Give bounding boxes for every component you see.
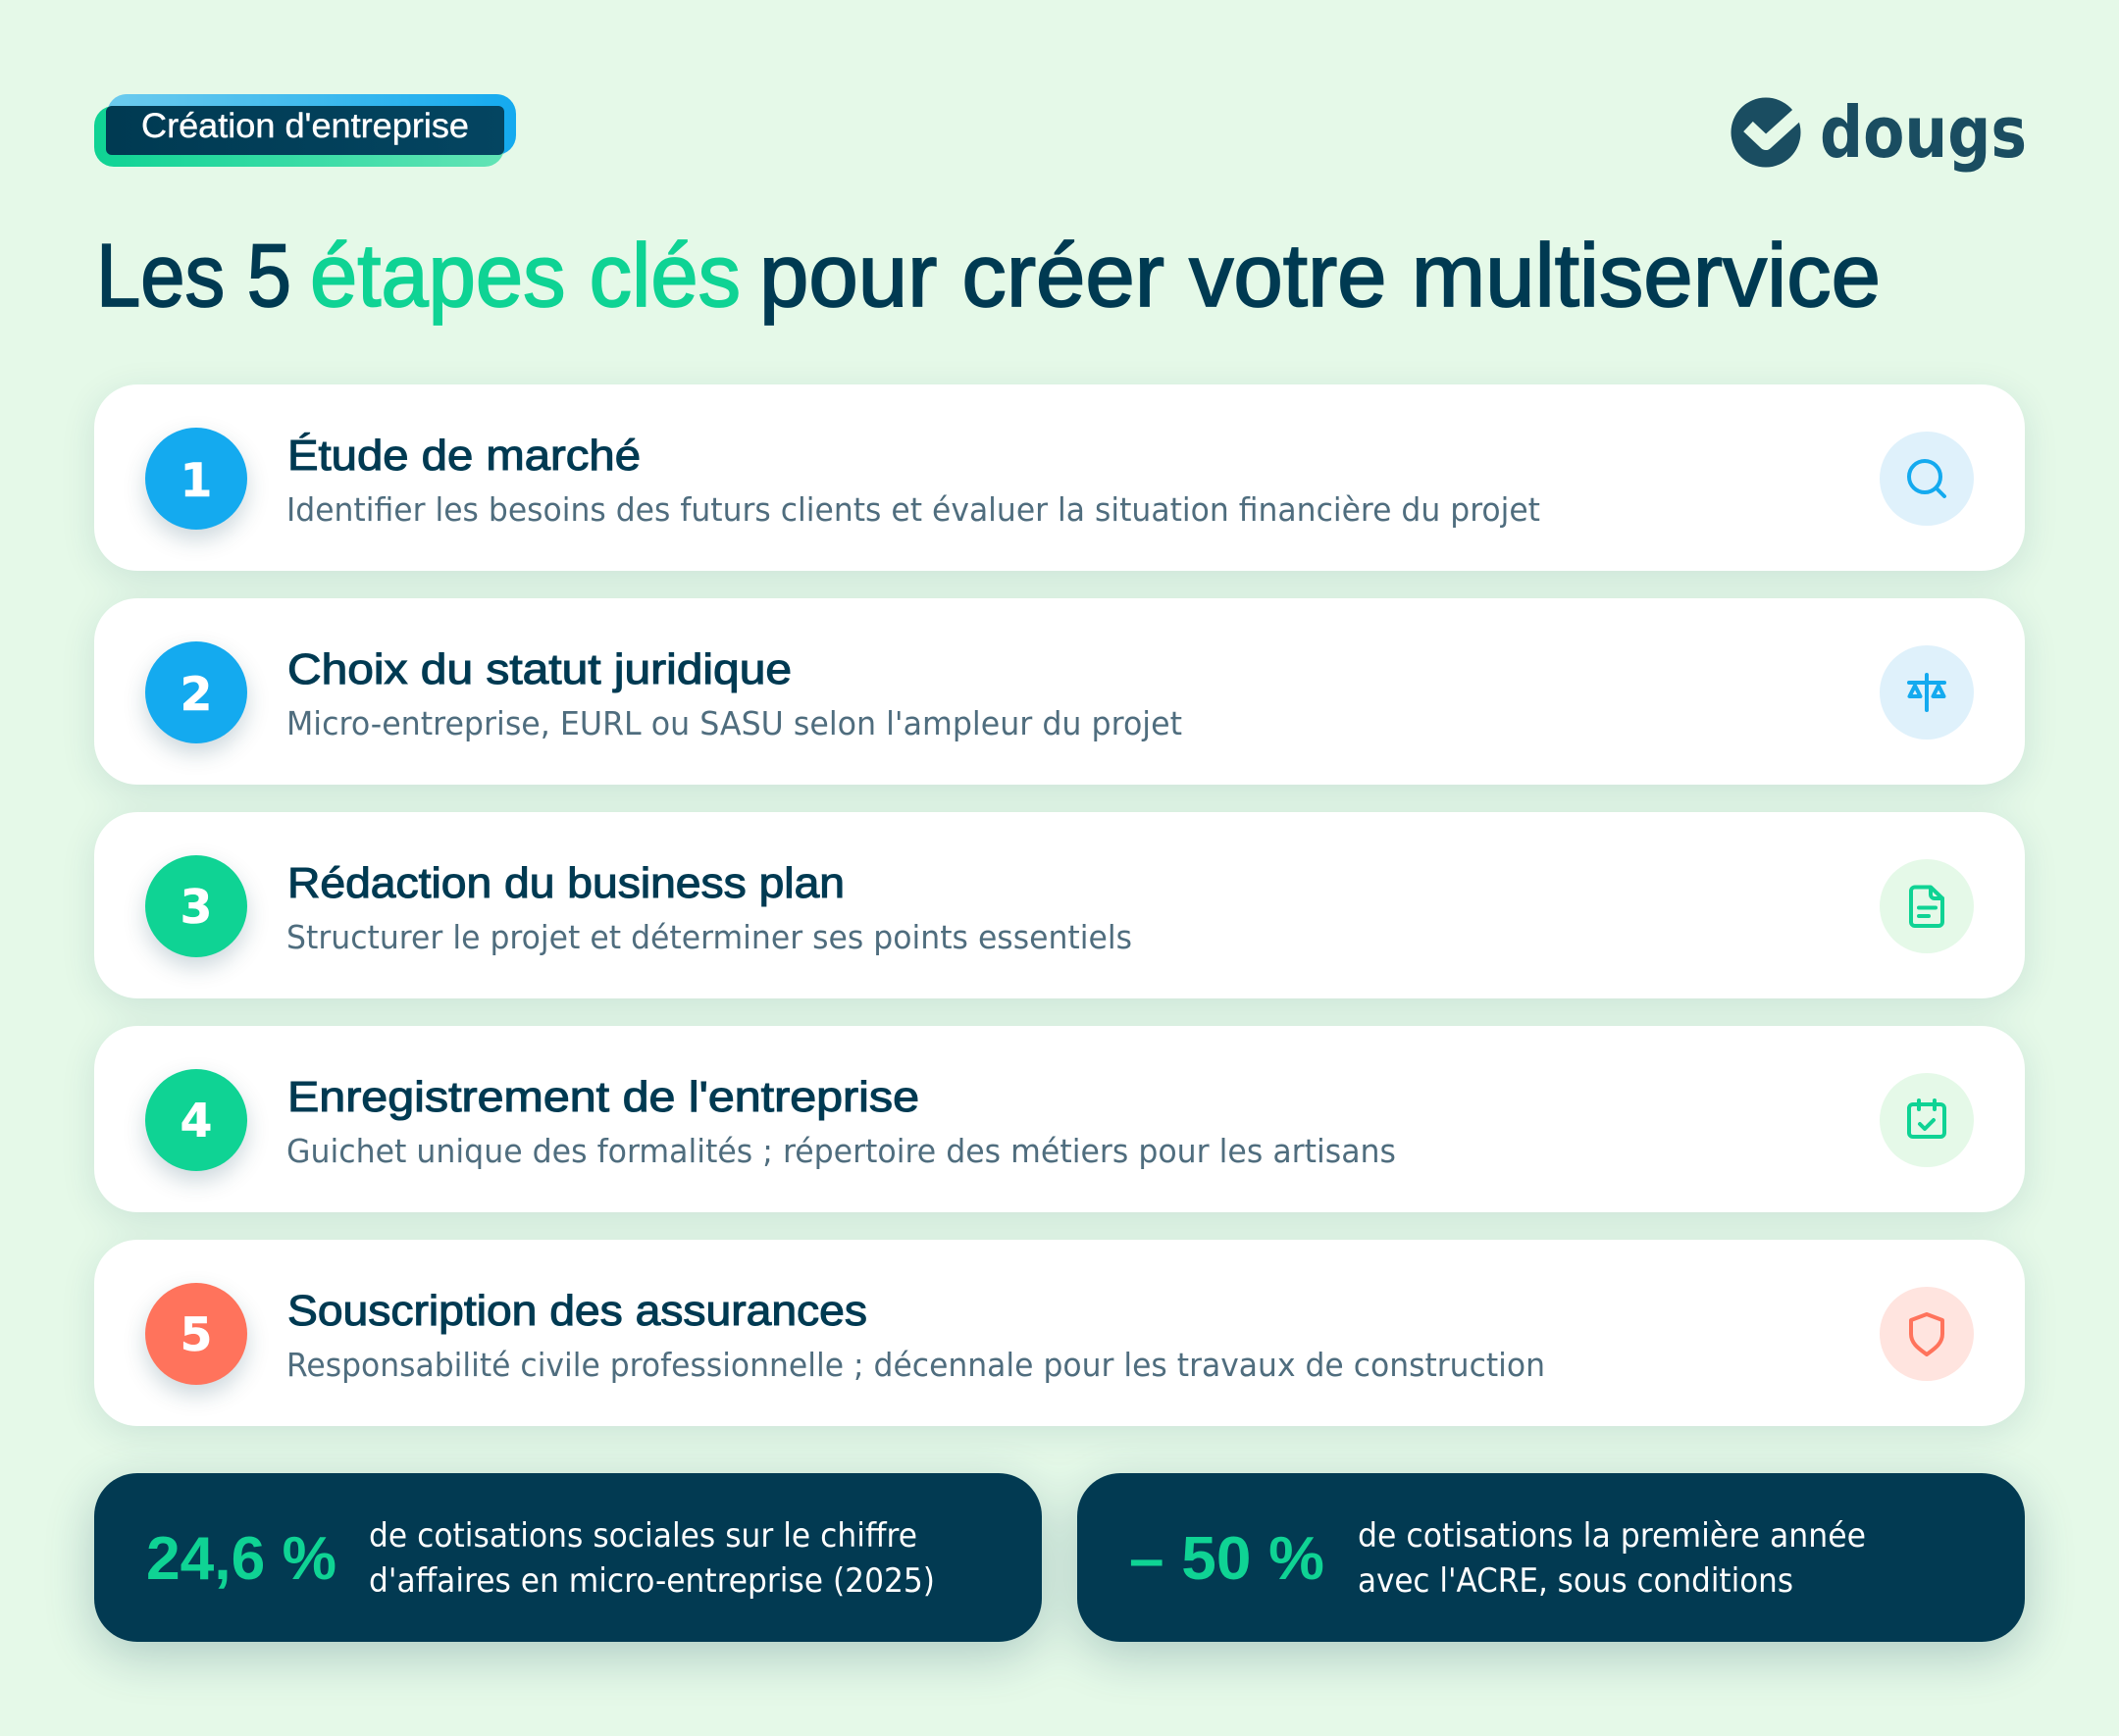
number badge 1 bbox=[145, 428, 247, 539]
stat panel: 24,6 % bbox=[94, 1473, 1042, 1642]
step 5 heading: Souscription des assurances bbox=[287, 1287, 867, 1335]
badge: Création d'entreprise: Création d'entreprise bbox=[141, 107, 469, 145]
icon: calendar bbox=[1880, 1073, 1974, 1167]
step 2 heading: Choix du statut juridique bbox=[287, 645, 792, 693]
number badge 4 bbox=[145, 1069, 247, 1181]
step 2 description: Micro-entreprise, EURL ou SASU selon l'ampleur du projet bbox=[286, 705, 1182, 742]
number badge 3: 3 bbox=[181, 881, 212, 935]
title: Les 5 bbox=[96, 227, 291, 326]
title bbox=[96, 227, 1881, 326]
panel: step 5 bbox=[94, 1240, 2025, 1426]
badge: Création d'entreprise bbox=[94, 94, 516, 167]
icon: document bbox=[1880, 859, 1974, 953]
icon: magnifier bbox=[1880, 432, 1974, 526]
step 4 heading: Enregistrement de l'entreprise bbox=[287, 1073, 919, 1121]
stat text: de cotisations la première année bbox=[1358, 1516, 1866, 1555]
panel: step 3 bbox=[94, 812, 2025, 998]
number badge 2 bbox=[145, 641, 247, 753]
number badge 2: 2 bbox=[181, 668, 212, 722]
panel: step 1 bbox=[94, 384, 2025, 571]
icon: shield bbox=[1880, 1287, 1974, 1381]
title: étapes clés bbox=[310, 227, 741, 326]
logo: dougs: dougs bbox=[1820, 91, 2027, 174]
stat value: – 50 % bbox=[1129, 1525, 1324, 1593]
number badge 1: 1 bbox=[181, 454, 212, 508]
stat text: avec l'ACRE, sous conditions bbox=[1358, 1561, 1793, 1600]
number badge 5: 5 bbox=[181, 1308, 212, 1362]
stat text: d'affaires en micro-entreprise (2025) bbox=[369, 1561, 935, 1600]
step 3 heading: Rédaction du business plan bbox=[287, 859, 845, 907]
step 1 heading: Étude de marché bbox=[287, 432, 641, 480]
stat panel: – 50 % bbox=[1077, 1473, 2025, 1642]
logo: dougs bbox=[1731, 91, 2027, 174]
stat text bbox=[369, 1516, 935, 1600]
number badge 4: 4 bbox=[181, 1095, 212, 1149]
step 4 description: Guichet unique des formalités ; répertoire des métiers pour les artisans bbox=[286, 1133, 1396, 1170]
stat text: de cotisations sociales sur le chiffre bbox=[369, 1516, 917, 1555]
stat text bbox=[1358, 1516, 1866, 1600]
icon: scales bbox=[1880, 645, 1974, 740]
number badge 3 bbox=[145, 855, 247, 967]
title: pour créer votre multiservice bbox=[759, 227, 1881, 326]
panel: step 2 bbox=[94, 598, 2025, 785]
stat value: 24,6 % bbox=[146, 1525, 336, 1593]
step 1 description: Identifier les besoins des futurs clients et évaluer la situation financière du projet bbox=[286, 491, 1540, 529]
panel: step 4 bbox=[94, 1026, 2025, 1212]
step 3 description: Structurer le projet et déterminer ses points essentiels bbox=[286, 919, 1132, 956]
number badge 5 bbox=[145, 1283, 247, 1395]
step 5 description: Responsabilité civile professionnelle ; décennale pour les travaux de construction bbox=[286, 1347, 1545, 1384]
